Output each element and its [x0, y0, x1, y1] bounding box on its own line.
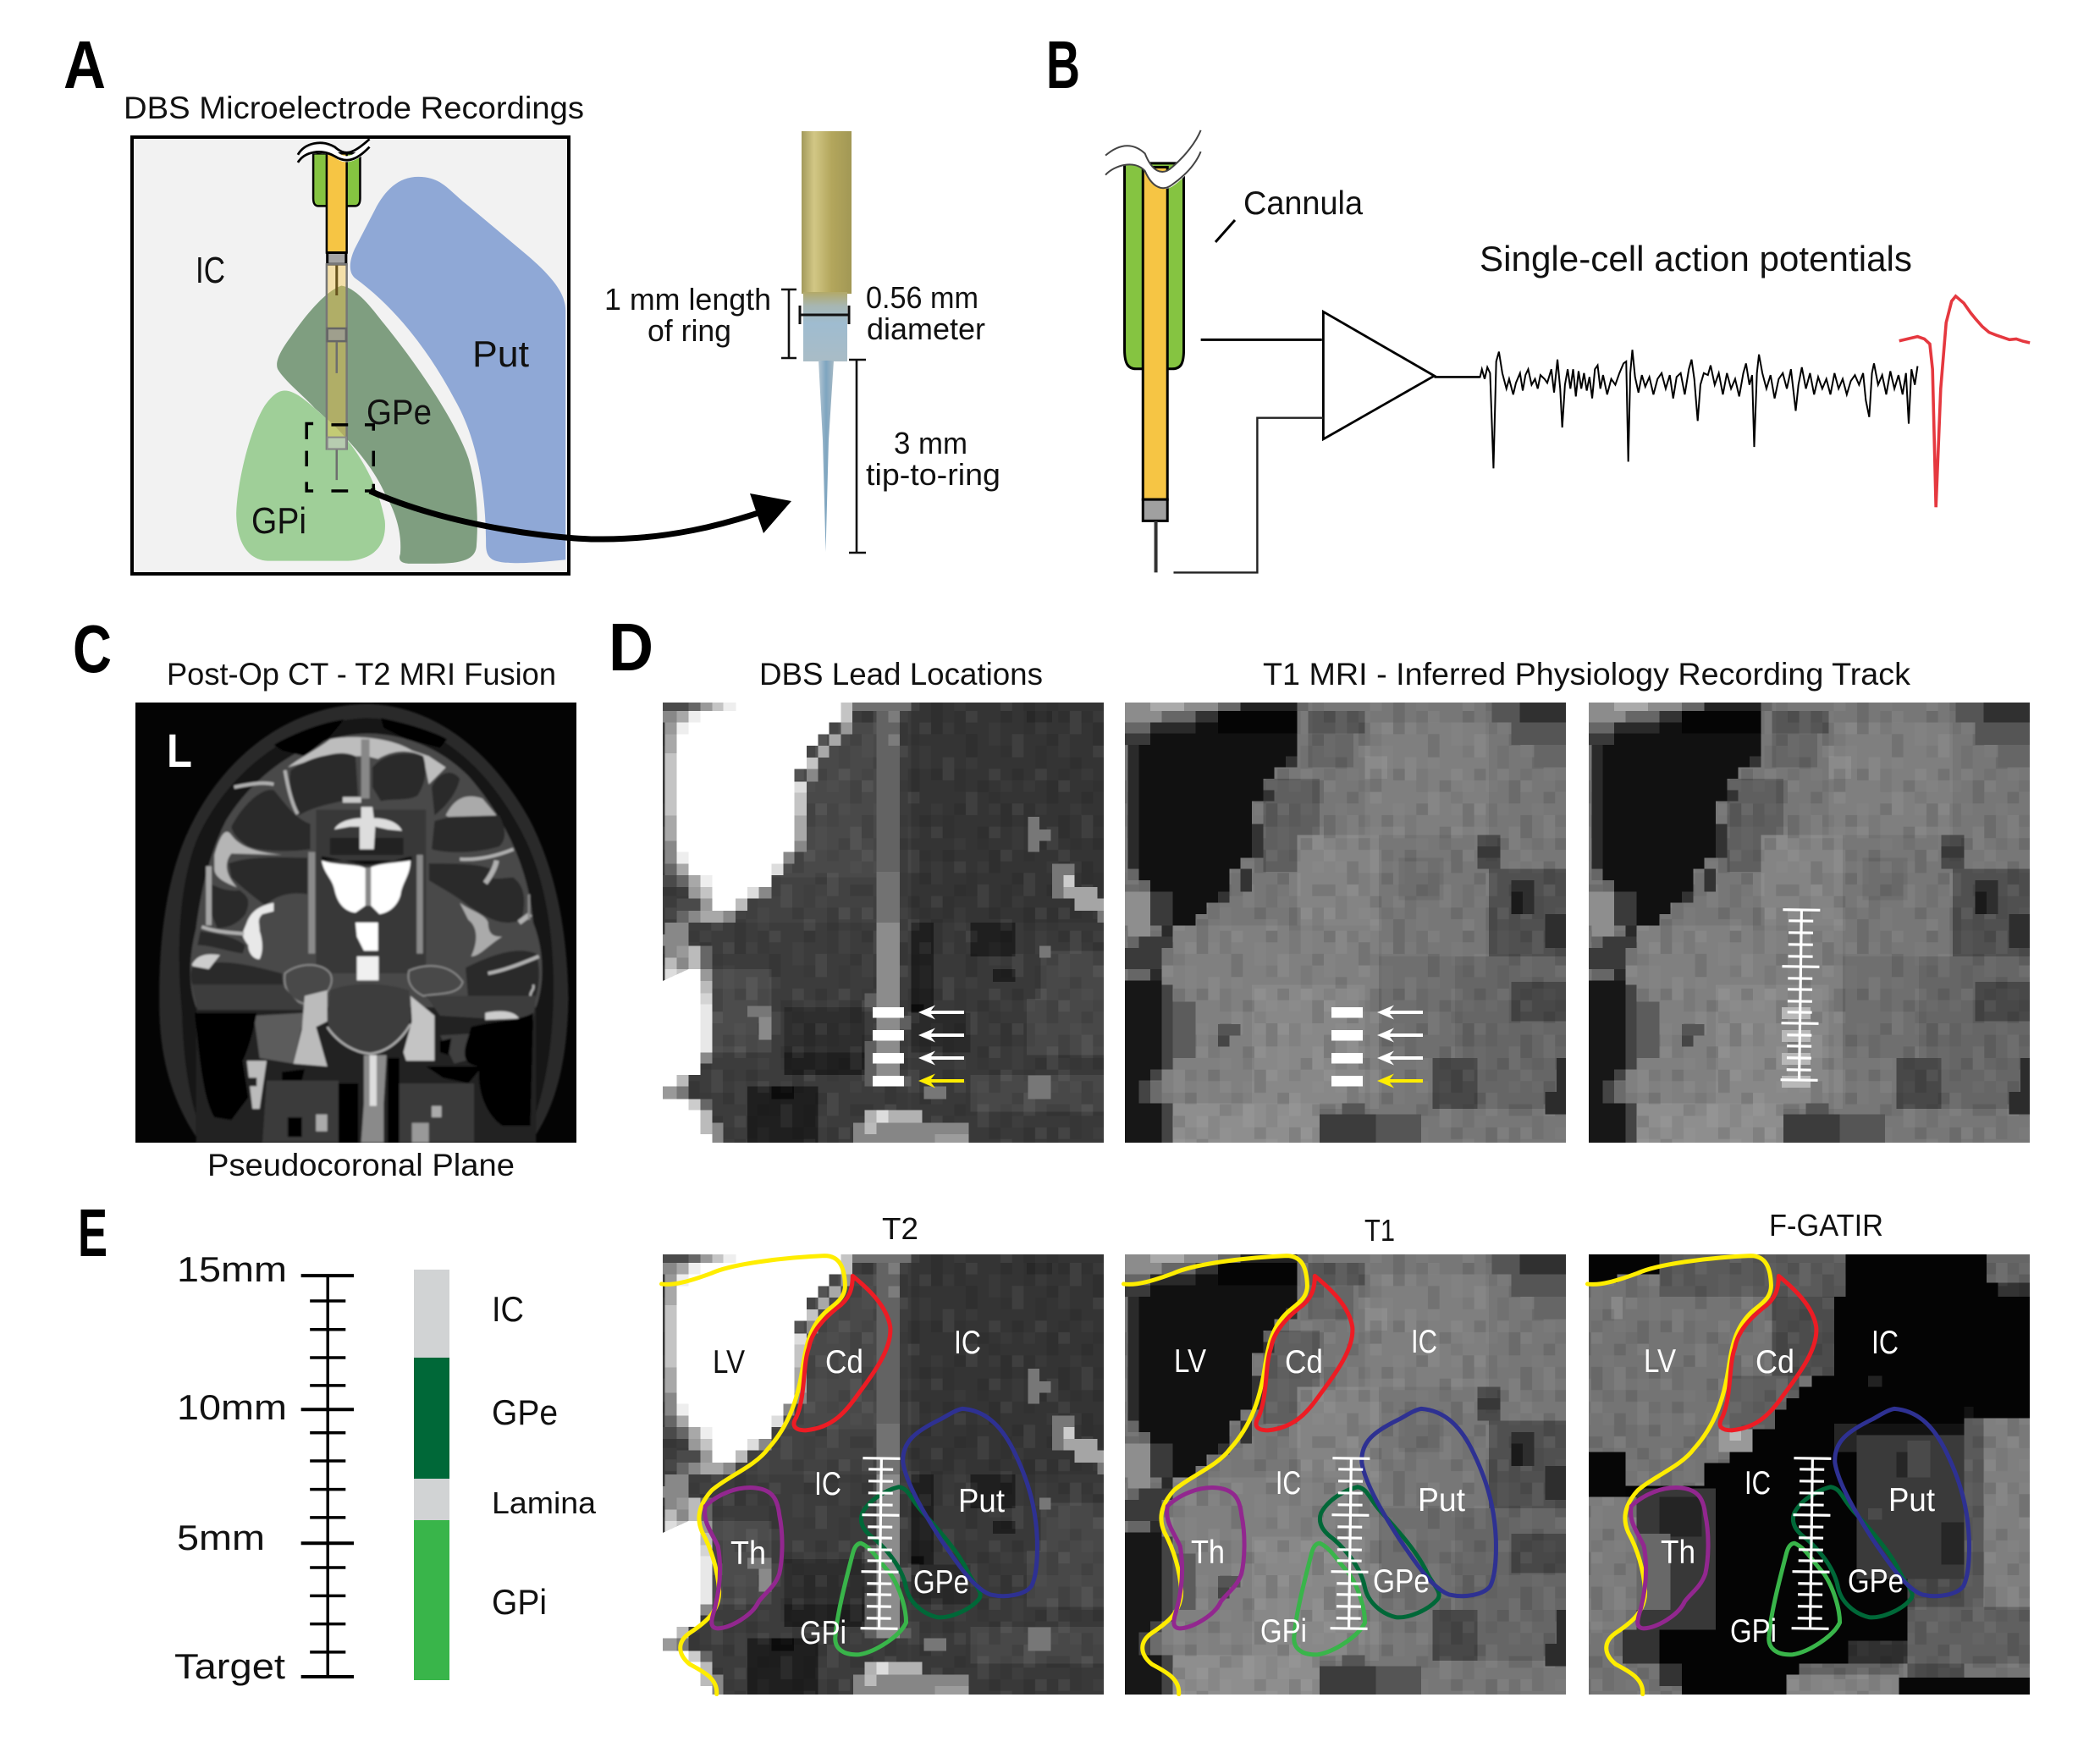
depth labels	[174, 1249, 287, 1686]
annotated T1 image: IC	[1411, 1324, 1437, 1360]
annotated T2 image: GPe	[913, 1564, 969, 1601]
electrode diagram with cannula	[298, 139, 370, 480]
annotated T1 image	[1124, 1254, 1566, 1695]
region labels: GPi	[492, 1582, 547, 1622]
region color bar	[414, 1270, 449, 1680]
annotated T1 image: IC	[1276, 1465, 1301, 1502]
panel letter B: B	[1046, 27, 1080, 102]
dimension labels	[604, 280, 1000, 492]
anatomy box	[132, 137, 569, 574]
panel letter A: A	[63, 27, 106, 102]
panel letter D: D	[609, 609, 653, 685]
region labels	[492, 1289, 597, 1622]
depth ruler	[301, 1276, 354, 1677]
anatomy regions: Put, GPe, GPi	[236, 177, 565, 564]
caption: Pseudocoronal Plane: Pseudocoronal Plane	[207, 1148, 515, 1182]
amplifier and wiring	[1173, 311, 1480, 572]
annotated F-GATIR image: IC	[1744, 1465, 1771, 1502]
labels in anatomy box: GPe	[367, 392, 432, 432]
heading: single-cell action potentials: Single-cell action potentials	[1480, 239, 1912, 278]
annotated T1 image: Th	[1191, 1535, 1225, 1571]
heading: T2: T2	[882, 1211, 918, 1246]
panel D: lead locations and recording track	[609, 609, 2030, 1143]
annotated F-GATIR image: Th	[1661, 1535, 1695, 1571]
region labels: IC	[492, 1289, 524, 1329]
heading: DBS Lead Locations: DBS Lead Locations	[759, 657, 1043, 692]
depth labels: Target	[174, 1646, 285, 1686]
dimension labels: 3 mm	[894, 426, 967, 460]
labels in anatomy box	[196, 250, 529, 542]
annotated F-GATIR image: GPe	[1848, 1563, 1904, 1600]
annotated T1 image: GPe	[1373, 1563, 1430, 1600]
region labels: GPe	[492, 1392, 558, 1432]
annotated T2 image: LV	[713, 1344, 745, 1381]
annotated T2 image	[662, 1254, 1104, 1695]
annotated T2 image: Cd	[825, 1344, 863, 1381]
dimension labels: 1 mm length	[604, 282, 771, 317]
panel C: post-op CT and T2 MRI fusion	[73, 611, 576, 1182]
panel E: depth scale and annotated MRI	[78, 1195, 2030, 1695]
dashed zoom box	[306, 424, 373, 491]
coronal brain image	[135, 703, 576, 1143]
annotated T2 image: Put	[958, 1483, 1005, 1519]
annotated T1 image: GPi	[1260, 1613, 1307, 1650]
annotated T2 image: IC	[814, 1466, 841, 1502]
labels in anatomy box: GPi	[251, 500, 306, 542]
T2 image with lead contacts	[663, 703, 1104, 1143]
T1 image with lead contacts	[1125, 703, 1566, 1143]
annotated F-GATIR image: GPi	[1730, 1613, 1777, 1650]
annotated T1 image: Put	[1418, 1482, 1465, 1518]
cannula label	[1215, 185, 1363, 242]
depth labels: 15mm	[177, 1249, 287, 1289]
dimension labels: of ring	[648, 313, 731, 348]
dimension labels: tip-to-ring	[866, 457, 1000, 492]
annotated T1 image: LV	[1174, 1343, 1206, 1380]
annotated F-GATIR image: IC	[1871, 1325, 1899, 1361]
panel B: recording circuit	[1046, 27, 2030, 572]
arrow to electrode photo	[370, 491, 791, 539]
panel letter E: E	[78, 1195, 107, 1270]
dimension brackets	[781, 289, 866, 553]
annotated F-GATIR image	[1588, 1254, 2030, 1695]
heading: T1 MRI inferred physiology recording track: T1 MRI - Inferred Physiology Recording Track	[1263, 657, 1910, 692]
annotated T2 image: GPi	[800, 1615, 846, 1651]
dimension labels: 0.56 mm	[866, 280, 978, 315]
recording trace	[1480, 350, 1917, 468]
heading: F-GATIR: F-GATIR	[1769, 1208, 1883, 1243]
heading: Post-Op CT - T2 MRI Fusion: Post-Op CT - T2 MRI Fusion	[167, 657, 556, 692]
annotated T2 image: IC	[954, 1325, 981, 1361]
depth labels: 10mm	[177, 1387, 287, 1427]
annotated T1 image: Cd	[1285, 1344, 1323, 1381]
depth labels: 5mm	[177, 1518, 265, 1557]
panel letter C: C	[73, 611, 112, 686]
dimension labels: diameter	[867, 311, 985, 346]
L orientation marker: L	[167, 724, 192, 777]
annotated F-GATIR image: Cd	[1756, 1344, 1794, 1381]
annotated F-GATIR image: Put	[1888, 1482, 1935, 1518]
annotated F-GATIR image: LV	[1644, 1343, 1676, 1380]
heading: DBS Microelectrode Recordings: DBS Microelectrode Recordings	[124, 91, 584, 125]
T1 image with recording track	[1589, 703, 2030, 1143]
annotated T2 image: Th	[730, 1535, 766, 1572]
cannula and electrode diagram	[1100, 129, 1203, 572]
heading: T1: T1	[1364, 1213, 1395, 1248]
cannula label: Cannula	[1243, 185, 1363, 222]
averaged spike waveform	[1899, 296, 2030, 507]
labels in anatomy box: Put	[472, 333, 529, 375]
region labels: Lamina	[492, 1485, 597, 1520]
panel A: DBS microelectrode recordings	[63, 27, 1000, 574]
electrode photo	[802, 131, 852, 552]
labels in anatomy box: IC	[196, 250, 225, 291]
